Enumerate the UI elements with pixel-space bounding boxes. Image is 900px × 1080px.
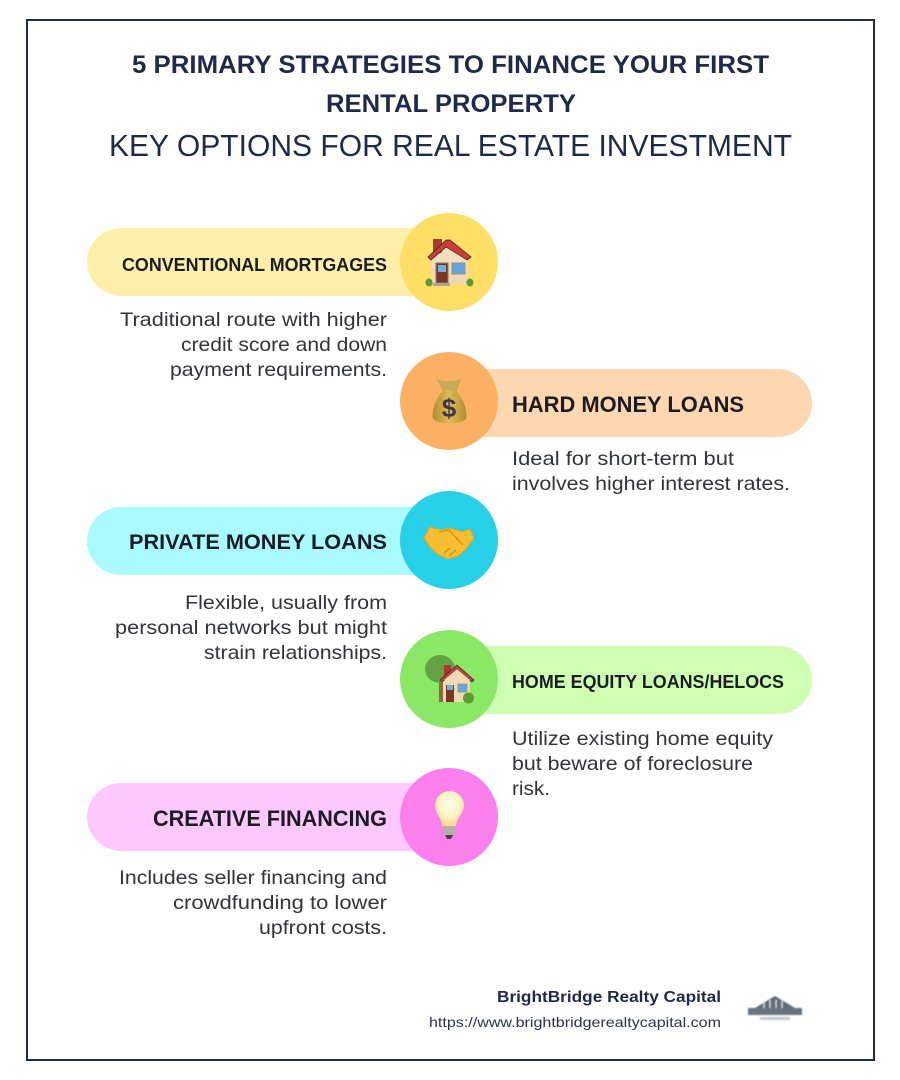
icon circle: pink — [400, 768, 498, 866]
label pill: creative financing — [87, 783, 450, 851]
description: creative financing: crowdfunding to lower — [173, 892, 388, 914]
label pill: hard money loans — [450, 369, 812, 437]
description: hard money loans: involves higher interest rates. — [512, 473, 790, 495]
description: hard money loans — [512, 448, 790, 495]
label: hard money loans: HARD MONEY LOANS — [512, 392, 744, 417]
icon: house with tree — [425, 655, 474, 704]
icon: light bulb — [435, 791, 464, 839]
description: hard money loans: Ideal for short-term but — [512, 448, 735, 470]
description: conventional mortgages — [120, 309, 388, 381]
label pill: private money loans — [87, 507, 450, 575]
label pill: conventional mortgages — [87, 228, 450, 296]
icon circle: green — [400, 630, 498, 728]
description: private money loans: personal networks but might — [115, 617, 388, 639]
label: home equity loans: HOME EQUITY LOANS/HELOCS — [512, 672, 784, 692]
description: conventional mortgages: payment requirements. — [170, 359, 387, 381]
footer: company name: BrightBridge Realty Capital — [497, 989, 721, 1006]
panel: home equity loans — [400, 630, 812, 800]
label: private money loans: PRIVATE MONEY LOANS — [129, 531, 387, 554]
description: home equity loans: risk. — [512, 778, 550, 800]
panel: private money loans — [87, 491, 498, 664]
label: conventional mortgages: CONVENTIONAL MORTGAGES — [122, 255, 387, 275]
icon: handshake — [424, 527, 474, 559]
panel: creative financing — [87, 768, 498, 939]
description: home equity loans — [512, 728, 773, 800]
subtitle: KEY OPTIONS FOR REAL ESTATE INVESTMENT — [109, 128, 792, 163]
description: home equity loans: but beware of foreclosure — [512, 753, 753, 775]
label: creative financing: CREATIVE FINANCING — [153, 806, 387, 831]
description: private money loans: strain relationships. — [204, 642, 387, 664]
icon: house — [426, 239, 474, 286]
title — [132, 51, 769, 118]
footer: website url: https://www.brightbridgerealtycapital.com — [429, 1014, 721, 1030]
icon circle: yellow — [400, 213, 498, 311]
description: private money loans — [115, 592, 388, 664]
title: 5 PRIMARY STRATEGIES TO FINANCE YOUR FIRST — [132, 51, 769, 79]
description: private money loans: Flexible, usually from — [185, 592, 387, 614]
icon circle: cyan — [400, 491, 498, 589]
title: RENTAL PROPERTY — [326, 90, 576, 118]
icon: money bag — [432, 379, 467, 423]
description: creative financing: Includes seller financing and — [119, 867, 387, 889]
description: creative financing — [119, 867, 388, 939]
description: home equity loans: Utilize existing home equity — [512, 728, 773, 750]
icon circle: orange — [400, 352, 498, 450]
description: conventional mortgages: credit score and down — [181, 334, 387, 356]
label pill: home equity loans — [450, 646, 812, 714]
description: creative financing: upfront costs. — [259, 917, 387, 939]
panel: conventional mortgages — [87, 213, 498, 381]
panel: hard money loans — [400, 352, 812, 495]
footer: company logo — [748, 996, 802, 1020]
icon: money bag: $ — [442, 393, 457, 423]
description: conventional mortgages: Traditional route with higher — [120, 309, 388, 331]
